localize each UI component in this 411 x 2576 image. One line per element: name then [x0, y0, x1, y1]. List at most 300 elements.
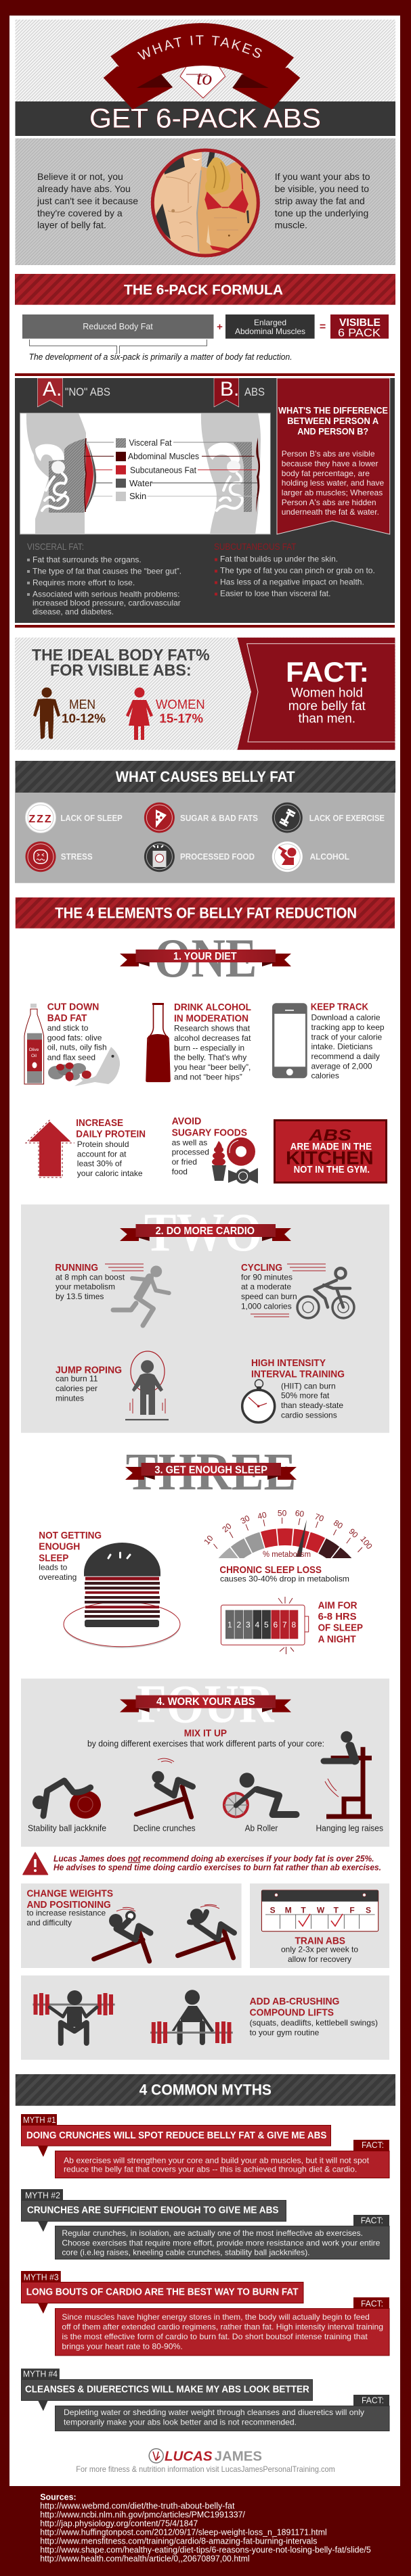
metabolism gauge: 70 — [313, 1512, 325, 1524]
callout: abs are made in the kitchen: ARE MADE IN THE — [290, 1141, 372, 1152]
icon: beer bottle — [146, 1003, 170, 1081]
mix it up text — [87, 1727, 324, 1749]
visceral fat list: disease, and diabetes. — [33, 607, 114, 617]
tip: keep track: recommend a daily — [311, 1052, 380, 1061]
formula boxes: VISIBLE — [339, 317, 381, 329]
tip: avoid sugary foods: processed — [172, 1148, 209, 1157]
intro text left — [37, 171, 138, 230]
header hatched panel — [15, 20, 395, 101]
panel: work your abs — [21, 1675, 389, 1847]
tip: drink alcohol in moderation: the belly. That's why — [174, 1053, 246, 1062]
myth 3: FACT: — [361, 2299, 383, 2309]
panel: compound lifts: COMPOUND LIFTS — [250, 2007, 334, 2019]
legend: skin: Skin — [129, 491, 146, 501]
fact callout: more belly fat — [288, 699, 366, 713]
myth 1 — [21, 2114, 389, 2178]
tip: jump roping: calories per — [56, 1384, 98, 1393]
metabolism gauge: causes 30-40% drop in metabolism — [220, 1574, 349, 1583]
sleep battery: 3 — [246, 1620, 251, 1630]
tip: hiit — [242, 1357, 345, 1422]
cause: sugar and bad fats — [144, 802, 258, 833]
formula boxes: Abdominal Muscles — [235, 327, 305, 336]
intro text right — [275, 171, 370, 230]
tip: increase daily protein — [26, 1117, 146, 1178]
callout: difference between person a and b: BETWEEN PERSON A — [287, 415, 378, 426]
tip: not getting enough sleep: leads to — [39, 1563, 68, 1572]
icon: calendar: M — [285, 1905, 292, 1915]
sleep battery: 8 — [292, 1620, 297, 1630]
tip: running — [55, 1262, 169, 1326]
footer logo: lucas james: For more fitness & nutrition information visit LucasJamesPersonalTraining.com — [76, 2464, 335, 2474]
legend: visceral fat — [87, 438, 252, 448]
metabolism gauge: 30 — [239, 1514, 251, 1526]
circle illustration: man and woman — [149, 149, 267, 260]
exercise: stability ball jackknife: Stability ball jackknife — [28, 1824, 106, 1833]
tip: cycling: for 90 minutes — [241, 1272, 293, 1282]
callout: difference between person a and b: holding less water, and have — [282, 478, 385, 488]
panel: compound lifts: (squats, deadlifts, kettlebell swings) — [250, 2018, 378, 2028]
a ribbon: "NO" ABS — [65, 385, 110, 398]
legend: subcutaneous fat: Subcutaneous Fat — [130, 465, 196, 475]
panel: train abs calendar: only 2-3x per week to — [281, 1945, 358, 1954]
intro text right: be visible, you need to — [275, 183, 369, 194]
icon: calendar: W — [317, 1905, 325, 1915]
legend: abdominal muscles: Abdominal Muscles — [128, 451, 199, 461]
tip: hiit: INTERVAL TRAINING — [251, 1369, 345, 1380]
myth 3: MYTH #3 — [24, 2272, 59, 2282]
icon: nuts — [48, 1062, 91, 1081]
panel: causes — [15, 793, 395, 883]
tip: cycling: 1,000 calories — [241, 1302, 292, 1311]
tip: jump roping: can burn 11 — [56, 1374, 98, 1384]
section banner: what causes belly fat — [15, 761, 395, 793]
a ribbon — [37, 378, 110, 407]
icon: calendar: S — [366, 1905, 371, 1915]
tip: hiit: than steady-state — [281, 1401, 343, 1410]
myth 1: Ab exercises will strengthen your core and build your ab muscles, but it will not spot — [64, 2155, 370, 2165]
panel: train abs calendar: allow for recovery — [288, 1954, 351, 1964]
panel: train abs calendar — [250, 1883, 389, 1968]
section banner: the 6-pack formula — [15, 274, 395, 305]
sources: http://www.ncbi.nlm.nih.gov/pmc/articles/PMC1991337/ — [40, 2510, 246, 2520]
body b — [201, 413, 261, 534]
sources: http://jap.physiology.org/content/75/4/1847 — [40, 2519, 198, 2529]
section banner: what causes belly fat: WHAT CAUSES BELLY FAT — [116, 768, 295, 785]
woman icon and stat: 15-17% — [159, 712, 203, 726]
tip: cycling: at a moderate — [241, 1282, 291, 1292]
tip: cut down bad fat: BAD FAT — [47, 1012, 87, 1024]
sleep battery: A NIGHT — [318, 1634, 356, 1645]
man icon and stat: 10-12% — [62, 712, 106, 726]
fact callout — [237, 638, 395, 750]
warning callout: Lucas James does not recommend doing ab exercises if your body fat is over 25%. — [53, 1854, 374, 1863]
cause: sugar and bad fats: SUGAR & BAD FATS — [180, 813, 258, 823]
icon: calendar: T — [301, 1905, 306, 1915]
man icon and stat — [33, 687, 106, 739]
formula boxes: Enlarged — [254, 318, 286, 327]
myth 2: FACT: — [361, 2216, 383, 2226]
subcutaneous fat list: Easier to lose than visceral fat. — [220, 589, 330, 599]
subcutaneous fat list: SUBCUTANEOUS FAT — [214, 541, 297, 552]
callout: difference between person a and b: because they have a lower — [282, 459, 378, 468]
exercise: decline crunches — [133, 1758, 196, 1833]
panel: change weights and positioning: to increase resistance — [27, 1908, 106, 1918]
myth 2: CRUNCHES ARE SUFFICIENT ENOUGH TO GIVE ME ABS — [27, 2205, 279, 2216]
myth 4: temporarily make your abs look better and is not recommended. — [64, 2418, 297, 2427]
panel: compound lifts — [21, 1975, 389, 2060]
section banner: the 6-pack formula: THE 6-PACK FORMULA — [124, 283, 283, 298]
callout: abs are made in the kitchen: KITCHEN — [286, 1148, 374, 1169]
intro text left: just can't see it because — [37, 195, 138, 206]
sources — [40, 2493, 371, 2564]
section banner: 4 common myths — [16, 2074, 395, 2106]
intro text right: muscle. — [275, 219, 307, 230]
cause: lack of sleep — [26, 802, 123, 833]
tip: keep track: calories — [311, 1071, 339, 1081]
tip: hiit: (HIIT) can burn — [281, 1381, 336, 1390]
icon: runner — [113, 1266, 169, 1326]
element three heading: 3. GET ENOUGH SLEEP — [154, 1464, 267, 1476]
figure: weighted decline crunch — [94, 1907, 150, 1961]
callout: abs are made in the kitchen: NOT IN THE GYM. — [294, 1164, 370, 1175]
tip: running: at 8 mph can boost — [56, 1272, 125, 1282]
tip: hiit: cardio sessions — [281, 1410, 337, 1420]
legend: skin — [92, 491, 257, 501]
panel: change weights and positioning — [21, 1883, 242, 1968]
myth 3: is the most effective form of cardio to burn fat. Do short boutsof intense training that — [62, 2332, 368, 2341]
tip: running: your metabolism — [56, 1282, 115, 1292]
intro text right: If you want your abs to — [275, 171, 370, 182]
tip: cut down bad fat: CUT DOWN — [47, 1001, 99, 1012]
formula boxes: = — [320, 321, 326, 333]
ribbon: what it takes to: WHAT IT TAKES — [137, 35, 261, 60]
icon: stopwatch — [242, 1380, 275, 1422]
myth 4: Depleting water or shedding water weight through cleanses and diueretics will only — [64, 2408, 364, 2417]
cause: alcohol — [272, 841, 349, 872]
myth 1: reduce the belly fat that covers your abs -- this is achieved through diet & cardio. — [64, 2164, 357, 2174]
visceral fat list: VISCERAL FAT: — [27, 541, 84, 552]
panel: ideal body fat — [15, 638, 395, 750]
tip: increase daily protein: least 30% of — [77, 1159, 123, 1169]
panel: person a vs person b — [15, 378, 395, 623]
exercise: stability ball jackknife — [28, 1781, 106, 1833]
legend: water — [95, 478, 257, 488]
footer logo: lucas james — [76, 2449, 335, 2474]
panel: compound lifts: ADD AB-CRUSHING — [250, 1996, 339, 2007]
visceral fat list: Associated with serious health problems: — [33, 590, 179, 599]
myth 4: MYTH #4 — [23, 2370, 58, 2379]
icon: jump rope figure — [125, 1351, 169, 1420]
subcutaneous fat list: The type of fat you can pinch or grab on to. — [220, 566, 375, 576]
icon: up arrow — [26, 1120, 74, 1177]
icon: fish — [74, 1047, 120, 1086]
sources: http://www.webmd.com/diet/the-truth-about-belly-fat — [40, 2501, 235, 2510]
element one heading: ONE — [154, 927, 257, 989]
sources: http://www.health.com/health/article/0,,20670897,00.html — [40, 2554, 250, 2564]
sleep battery: 2 — [237, 1620, 242, 1630]
tip: increase daily protein: account for at — [77, 1149, 127, 1158]
callout: difference between person a and b: Person A's abs are hidden — [282, 498, 376, 507]
exercise: ab roller: Ab Roller — [245, 1824, 278, 1833]
title bar: get 6-pack abs: GET 6-PACK ABS — [89, 104, 321, 134]
element two heading: 2. DO MORE CARDIO — [156, 1225, 255, 1237]
sleep battery: 6 — [274, 1620, 278, 1630]
legend: visceral fat: Visceral Fat — [129, 438, 172, 448]
tip: cut down bad fat: good fats: olive — [47, 1033, 102, 1042]
intro text right: tone up the underlying — [275, 208, 368, 218]
tip: drink alcohol in moderation: DRINK ALCOHOL — [174, 1002, 251, 1013]
myth 3 — [21, 2271, 389, 2356]
tip: not getting enough sleep: SLEEP — [39, 1552, 68, 1564]
metabolism gauge: 60 — [295, 1508, 305, 1519]
legend: abdominal muscles — [84, 451, 255, 461]
icon: olive oil bottle: Oil — [31, 1054, 37, 1058]
cause: stress — [26, 841, 93, 872]
mix it up text: by doing different exercises that work different parts of your core: — [87, 1739, 324, 1749]
title bar: get 6-pack abs — [15, 101, 395, 136]
icon: ice cream — [212, 1141, 226, 1181]
cause: processed food: PROCESSED FOOD — [180, 851, 255, 862]
figure: squat — [33, 1990, 115, 2043]
exercise: decline crunches: Decline crunches — [133, 1824, 196, 1833]
panel: train abs calendar: TRAIN ABS — [295, 1935, 345, 1946]
bracket and formula note: The development of a six-pack is primarily a matter of body fat reduction. — [29, 352, 293, 362]
icon: donut — [227, 1138, 255, 1166]
myth 3: off of them after extended cardio regimens, rather than fat. High intensity interval training — [62, 2322, 383, 2332]
tip: not getting enough sleep: overeating — [39, 1572, 77, 1582]
tip: running: RUNNING — [55, 1262, 98, 1273]
tip: drink alcohol in moderation: and not “beer hips” — [174, 1073, 242, 1082]
metabolism gauge: CHRONIC SLEEP LOSS — [219, 1564, 322, 1576]
callout: difference between person a and b: Person B's abs are visible — [282, 449, 375, 459]
myth 3: brings your heart rate to 80-90%. — [62, 2341, 183, 2351]
element one heading: 1. YOUR DIET — [173, 951, 237, 962]
sleep battery — [221, 1597, 363, 1654]
bracket and formula note — [29, 339, 293, 362]
myth 1: DOING CRUNCHES WILL SPOT REDUCE BELLY FAT & GIVE ME ABS — [26, 2130, 327, 2141]
metabolism gauge — [202, 1508, 374, 1583]
tip: jump roping: minutes — [56, 1393, 84, 1403]
b ribbon: ABS — [244, 385, 265, 398]
icon: olive oil bottle: Olive — [29, 1048, 39, 1052]
icon: calendar: F — [349, 1905, 355, 1915]
fact callout: Women hold — [291, 686, 363, 701]
exercise: hanging leg raises — [316, 1731, 383, 1833]
sources: Sources: — [40, 2493, 77, 2502]
metabolism gauge: 10 — [202, 1533, 215, 1547]
icon: calendar: S — [270, 1905, 276, 1915]
sources: http://www.huffingtonpost.com/2012/09/17/sleep-weight-loss_n_1891171.html — [40, 2528, 327, 2537]
tip: keep track: tracking app to keep — [311, 1023, 385, 1032]
tip: keep track: track of your calorie — [311, 1032, 383, 1041]
woman icon and stat: WOMEN — [156, 698, 205, 712]
tip: increase daily protein: Protein should — [77, 1140, 129, 1149]
fact callout: FACT: — [286, 656, 369, 688]
intro text left: already have abs. You — [37, 183, 131, 194]
cause: lack of exercise: LACK OF EXERCISE — [309, 813, 385, 823]
myth 2 — [21, 2189, 389, 2259]
metabolism gauge: 50 — [278, 1508, 287, 1518]
tip: keep track: KEEP TRACK — [311, 1001, 368, 1012]
subcutaneous fat list: Has less of a negative impact on health. — [220, 578, 364, 587]
visceral fat list: Fat that surrounds the organs. — [33, 555, 142, 565]
woman icon and stat — [126, 687, 205, 740]
tip: avoid sugary foods — [172, 1116, 258, 1184]
ribbon: what it takes to: to — [196, 67, 212, 89]
body a — [26, 413, 96, 534]
callout: difference between person a and b: body fat percentage, are — [282, 469, 370, 478]
myth 4: FACT: — [362, 2395, 384, 2405]
element four heading: 4. WORK YOUR ABS — [156, 1696, 255, 1708]
tip: avoid sugary foods: as well as — [172, 1138, 207, 1147]
icon: burger on plate — [64, 1543, 180, 1648]
heading: ideal body fat: THE IDEAL BODY FAT% — [32, 647, 210, 665]
sleep battery: 7 — [282, 1620, 287, 1630]
footer logo: lucas james: LUCAS — [165, 2449, 213, 2464]
element four heading: FOUR — [137, 1675, 275, 1735]
tip: increase daily protein: your caloric intake — [77, 1169, 143, 1178]
tip: cycling: speed can burn — [241, 1292, 297, 1301]
mix it up text: MIX IT UP — [184, 1727, 227, 1739]
subcutaneous fat list: Fat that builds up under the skin. — [220, 555, 338, 564]
cause: alcohol: ALCOHOL — [310, 851, 349, 862]
tip: cycling: CYCLING — [241, 1262, 282, 1273]
callout: difference between person a and b: AND PERSON B? — [297, 426, 368, 437]
legend: subcutaneous fat — [95, 465, 257, 475]
tip: hiit: 50% more fat — [281, 1391, 330, 1401]
man icon and stat: MEN — [69, 698, 95, 712]
myth 1: FACT: — [362, 2140, 384, 2150]
metabolism gauge: 100 — [358, 1535, 374, 1551]
cause: processed food — [144, 841, 255, 872]
metabolism gauge: % metabolism — [263, 1551, 311, 1559]
formula boxes: + — [217, 321, 223, 333]
panel: change weights and positioning: and difficulty — [27, 1918, 72, 1927]
tip: running: by 13.5 times — [56, 1292, 104, 1301]
legend: water: Water — [129, 478, 153, 488]
ribbon: what it takes to — [103, 23, 301, 110]
formula boxes — [22, 314, 389, 339]
figure: deadlift — [150, 1990, 233, 2044]
icon: calendar — [261, 1890, 378, 1931]
warning callout: He advises to spend time doing cardio exercises to burn fat rather than ab exercises. — [53, 1863, 381, 1872]
myth 4 — [21, 2368, 389, 2431]
tip: increase daily protein: DAILY PROTEIN — [76, 1129, 146, 1140]
tip: cut down bad fat: oil, nuts, oily fish — [47, 1043, 107, 1052]
intro text left: Believe it or not, you — [37, 171, 123, 182]
sleep battery: 4 — [255, 1620, 260, 1630]
callout: difference between person a and b — [277, 378, 390, 534]
tip: increase daily protein: INCREASE — [76, 1117, 123, 1129]
heading: ideal body fat — [32, 647, 210, 680]
tip: keep track: average of 2,000 — [311, 1061, 372, 1071]
formula boxes: Reduced Body Fat — [83, 322, 153, 331]
callout: abs are made in the kitchen — [275, 1120, 386, 1182]
tip: avoid sugary foods: food — [172, 1167, 188, 1177]
b ribbon — [214, 378, 265, 407]
warning callout — [23, 1852, 381, 1875]
tip: cut down bad fat: and stick to — [47, 1023, 89, 1033]
icon: olive oil bottle — [24, 1004, 44, 1084]
section banner: 4 elements: THE 4 ELEMENTS OF BELLY FAT REDUCTION — [55, 904, 357, 921]
tip: cut down bad fat: and flax seed — [47, 1052, 95, 1062]
tip: drink alcohol in moderation: IN MODERATION — [174, 1013, 248, 1025]
tip: not getting enough sleep — [39, 1530, 180, 1648]
element three heading: THREE — [126, 1443, 297, 1501]
formula boxes: 6 PACK — [338, 326, 381, 339]
footer logo: lucas james: JAMES — [215, 2449, 262, 2464]
tip: keep track: Download a calorie — [311, 1013, 381, 1023]
exercise: ab roller — [224, 1773, 297, 1833]
tip: drink alcohol in moderation: you hear “beer belly”, — [174, 1062, 251, 1072]
subcutaneous fat list — [214, 541, 375, 599]
tip: hiit: HIGH INTENSITY — [251, 1357, 326, 1369]
icon: cyclist — [297, 1268, 354, 1318]
section banner: 4 elements — [16, 897, 395, 929]
intro text left: they're covered by a — [37, 208, 123, 218]
tip: not getting enough sleep: ENOUGH — [39, 1541, 80, 1553]
sources: http://www.shape.com/healthy-eating/diet-tips/6-reasons-youre-not-losing-belly-fat/slide/5 — [40, 2546, 371, 2555]
sleep battery: 6-8 HRS — [318, 1611, 357, 1622]
panel: do more cardio — [21, 1203, 389, 1433]
sleep battery: 1 — [228, 1620, 232, 1630]
tip: keep track — [272, 1001, 385, 1081]
myth 2: Choose exercises that require more effort, provide more resistance and work your entire — [62, 2238, 381, 2247]
visceral fat list — [27, 541, 181, 617]
callout: difference between person a and b: WHAT'S THE DIFFERENCE — [278, 405, 388, 416]
tip: not getting enough sleep: NOT GETTING — [39, 1530, 102, 1541]
tip: drink alcohol in moderation — [146, 1002, 251, 1082]
icon: calendar: T — [334, 1905, 339, 1915]
panel: compound lifts: to your gym routine — [250, 2028, 320, 2037]
myth 4: CLEANSES & DIUERECTICS WILL MAKE MY ABS LOOK BETTER — [25, 2384, 309, 2395]
tip: drink alcohol in moderation: burn -- especially in — [174, 1043, 244, 1052]
visceral fat list: The type of fat that causes the “beer gut”. — [33, 567, 181, 576]
exercise: hanging leg raises: Hanging leg raises — [316, 1824, 383, 1833]
callout: abs are made in the kitchen: ABS — [308, 1127, 351, 1145]
myth 2: MYTH #2 — [25, 2191, 60, 2200]
abdomen cross-section diagram — [20, 413, 270, 534]
myth 3: Since muscles have higher energy stores in them, the body will actually begin to feed — [62, 2312, 370, 2322]
tip: avoid sugary foods: or fried — [172, 1157, 197, 1167]
panel: change weights and positioning: CHANGE WEIGHTS — [27, 1888, 113, 1899]
myth 2: Regular crunches, in isolation, are actually one of the most ineffective ab exercises. — [62, 2228, 363, 2238]
icon: candy — [228, 1168, 258, 1184]
tip: jump roping: JUMP ROPING — [56, 1365, 122, 1376]
visceral fat list: Requires more effort to lose. — [33, 578, 135, 588]
tip: jump roping — [56, 1351, 169, 1420]
callout: difference between person a and b: larger ab muscles; Whereas — [282, 488, 383, 498]
metabolism gauge: 40 — [257, 1510, 267, 1521]
panel: change weights and positioning: AND POSITIONING — [27, 1899, 111, 1911]
cause: lack of sleep: ZZZ — [28, 814, 53, 825]
fact callout: than men. — [299, 712, 355, 726]
sleep battery: AIM FOR — [318, 1599, 358, 1611]
intro panel — [15, 139, 395, 265]
metabolism gauge: 80 — [332, 1518, 345, 1531]
myth 1: MYTH #1 — [23, 2115, 56, 2125]
callout: difference between person a and b: underneath the fat & water. — [282, 507, 379, 517]
element two heading: TWO — [144, 1203, 262, 1263]
icon: phone — [272, 1003, 307, 1078]
visceral fat list: increased blood pressure, cardiovascular — [33, 599, 181, 608]
heading: ideal body fat: FOR VISIBLE ABS: — [50, 661, 192, 680]
metabolism gauge: 20 — [220, 1521, 234, 1535]
section banner: 4 common myths: 4 COMMON MYTHS — [139, 2081, 272, 2098]
tip: drink alcohol in moderation: Research shows that — [174, 1024, 251, 1033]
tip: cut down bad fat — [24, 1001, 120, 1086]
sleep battery: OF SLEEP — [318, 1622, 363, 1634]
